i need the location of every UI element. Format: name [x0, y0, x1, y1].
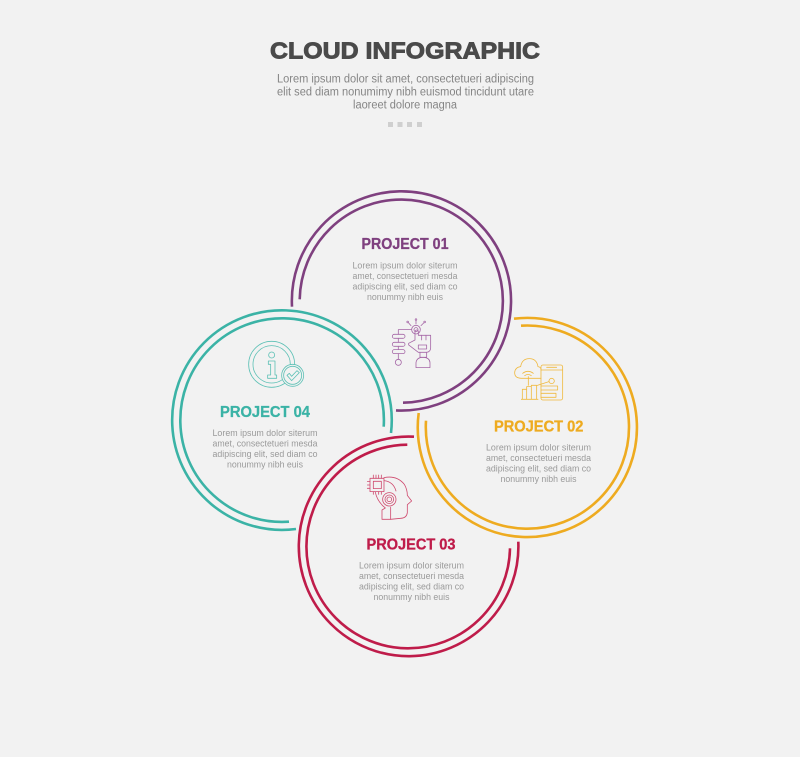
pagination dots — [388, 122, 422, 127]
project 01 text: amet, consectetueri mesda — [352, 271, 458, 281]
project 04 text: amet, consectetueri mesda — [212, 438, 318, 448]
project 04 text — [212, 428, 318, 470]
project 04 text: Lorem ipsum dolor siterum — [212, 428, 318, 438]
intro text — [277, 74, 534, 112]
panel: project 02 — [418, 318, 637, 537]
header block — [270, 38, 540, 127]
project 01 text: adipiscing elit, sed diam co — [352, 282, 458, 292]
panel: project 01 — [292, 191, 511, 411]
project 02 text: adipiscing elit, sed diam co — [486, 464, 591, 474]
project 01 text: Lorem ipsum dolor siterum — [352, 260, 458, 270]
project 02 text: nonummy nibh euis — [500, 474, 577, 484]
intro text: Lorem ipsum dolor sit amet, consectetueri adipiscing — [277, 74, 534, 86]
project 03 text: Lorem ipsum dolor siterum — [359, 560, 464, 570]
purple double ring — [292, 191, 511, 411]
intro text: elit sed diam nonumimy nibh euismod tincidunt utare — [277, 86, 534, 98]
icon: info badge with check — [249, 341, 304, 387]
project 04 text: nonummy nibh euis — [227, 460, 303, 470]
project 01 text: nonummy nibh euis — [367, 292, 443, 302]
project 03 text: amet, consectetueri mesda — [359, 571, 464, 581]
teal double ring — [172, 310, 392, 530]
intro text: laoreet dolore magna — [353, 100, 458, 112]
icon: robot hand flowchart — [392, 319, 431, 368]
project 03 text: nonummy nibh euis — [374, 592, 450, 602]
project 03 heading: PROJECT 03 — [366, 536, 456, 554]
project 04 heading: PROJECT 04 — [220, 404, 310, 421]
project 02 text: amet, consectetueri mesda — [486, 453, 591, 463]
project 01 text — [352, 260, 458, 302]
panel: project 03 — [299, 437, 518, 656]
project 03 text: adipiscing elit, sed diam co — [359, 582, 464, 592]
project 01 heading: PROJECT 01 — [362, 236, 449, 253]
icon: cloud and phone — [515, 359, 563, 400]
title: CLOUD INFOGRAPHIC — [270, 38, 540, 64]
yellow double ring — [418, 318, 637, 537]
project 04 text: adipiscing elit, sed diam co — [212, 449, 318, 459]
project 03 text — [359, 560, 464, 602]
project 02 text: Lorem ipsum dolor siterum — [486, 442, 591, 452]
red double ring — [299, 437, 518, 656]
project 02 text — [486, 442, 591, 484]
icon: AI head with chip — [367, 475, 412, 519]
panel: project 04 — [172, 310, 392, 530]
project 02 heading: PROJECT 02 — [494, 418, 583, 436]
